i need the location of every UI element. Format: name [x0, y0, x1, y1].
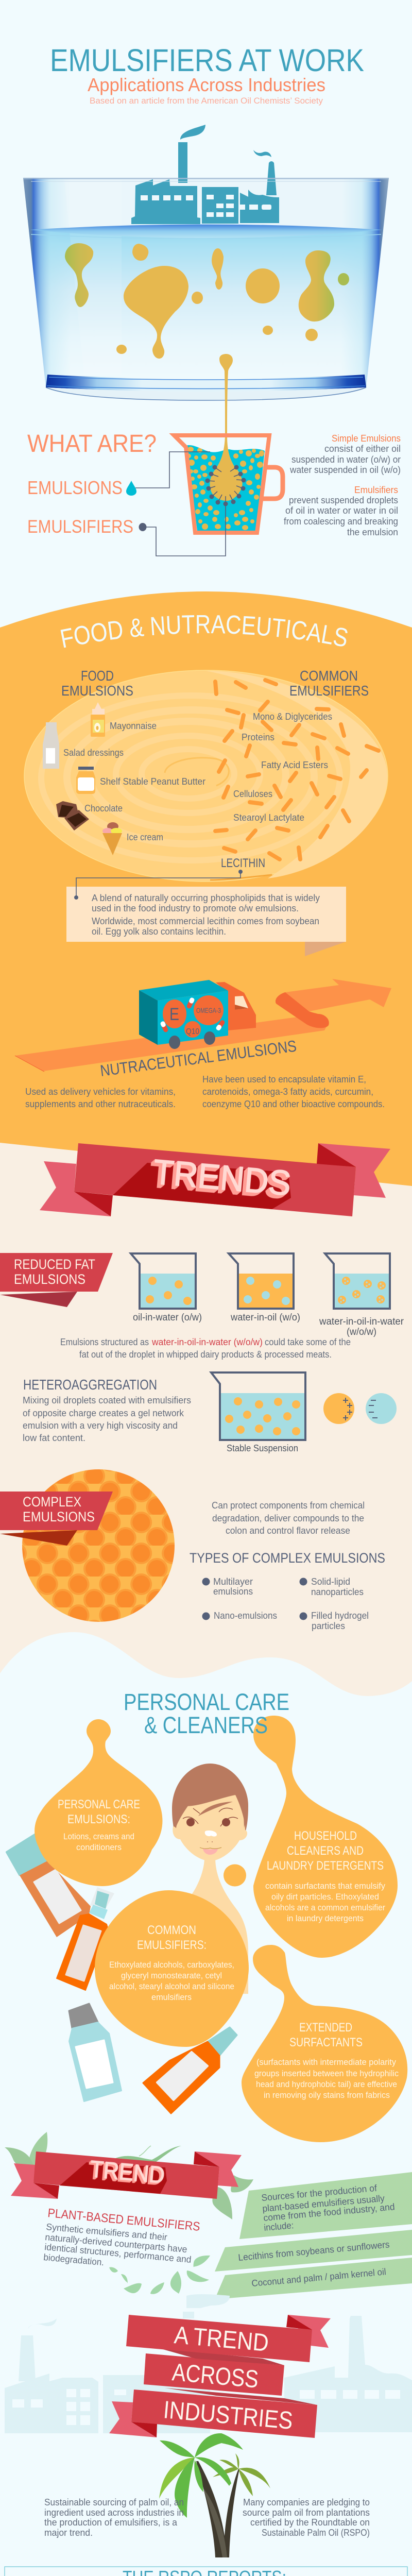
blob: common emulsifiers: COMMON: [147, 1923, 196, 1937]
blob: household cleaners: alcohols are a common emulsifier: [265, 1903, 385, 1912]
icon: factory: [131, 125, 279, 224]
blob: household cleaners: in laundry detergents: [287, 1913, 364, 1923]
blob: common emulsifiers: emulsifiers: [151, 1992, 192, 2002]
label: complex emulsions: EMULSIONS: [23, 1509, 95, 1524]
text block: simple emulsions and emulsifiers: the emulsion: [347, 527, 398, 537]
text block: complex emulsions: degradation, deliver compounds to the: [212, 1513, 364, 1523]
banner: trend: [11, 2151, 242, 2199]
banner: a trend across industries: A TREND: [173, 2321, 270, 2357]
blob: household cleaners: [253, 1716, 398, 1958]
blob: extended surfactants: (surfactants with intermediate polarity: [256, 2057, 396, 2067]
heading: food emulsions: EMULSIONS: [61, 683, 133, 699]
wave divider to personal care section: [0, 1632, 412, 1716]
bottle: light blue: [69, 2004, 122, 2102]
text block: heteroaggregation: [23, 1395, 191, 1443]
blob: extended surfactants: [242, 1945, 407, 2142]
blob: personal care emulsions: Lotions, creams and: [63, 1832, 134, 1841]
connector lines: [135, 452, 226, 556]
beaker: water in oil: [229, 1253, 300, 1323]
icon: chocolate: [56, 801, 89, 831]
label: reduced fat emulsions: EMULSIONS: [14, 1272, 85, 1287]
blob: common emulsifiers: [95, 1890, 249, 2047]
oil drop stream: [210, 354, 243, 501]
blob: personal care emulsions: [35, 1719, 162, 1886]
blob: common emulsifiers: glyceryl monostearate, cetyl: [121, 1971, 222, 1980]
text block: water in oil in water: water-in-oil-in-water (w/o/w): [151, 1337, 263, 1347]
callout: lecithin: [66, 870, 346, 956]
icon: salad dressing bottle: [43, 722, 59, 769]
heading: lecithin: LECITHIN: [221, 856, 265, 870]
bottle: teal and orange: [7, 1834, 91, 1937]
beaker: water in oil: water-in-oil (w/o): [230, 1312, 300, 1323]
text block: heteroaggregation: of opposite charge creates a gel network: [23, 1408, 184, 1418]
text block: companies pledging: Sustainable Palm Oil (RSPO): [262, 2528, 370, 2538]
text block: complex emulsions: Can protect components from chemical: [212, 1500, 365, 1511]
text block: complex emulsions: [212, 1500, 365, 1536]
label: ice cream: Ice cream: [127, 832, 163, 842]
list: types of complex emulsions: Filled hydrogel: [311, 1611, 369, 1621]
illustration: woman: [172, 1764, 248, 1994]
heading: what are emulsions and emulsifiers: EMULSIONS: [27, 477, 123, 498]
icon: nutraceutical truck: [139, 980, 256, 1049]
cream trends background: [0, 1133, 412, 1710]
heading: what are emulsions and emulsifiers: [27, 430, 157, 537]
callout: lecithin: used in the food industry to promote o/w emulsions.: [92, 903, 299, 913]
heading: what are emulsions and emulsifiers: WHAT ARE?: [27, 430, 157, 457]
label: salad dressings: Salad dressings: [63, 748, 124, 758]
text block: simple emulsions and emulsifiers: prevent suspended droplets: [289, 495, 398, 505]
icon: nutraceutical truck: E: [169, 1005, 179, 1024]
icon: charged oil droplet: [323, 1393, 354, 1424]
label: reduced fat emulsions: REDUCED FAT: [14, 1257, 95, 1272]
labels: common emulsifiers list: Stearoyl Lactylate: [233, 812, 304, 823]
text block: companies pledging: [243, 2497, 370, 2538]
text block: nutraceutical left: [25, 1087, 176, 1109]
banner: trends: [40, 1143, 390, 1216]
text block: plant-based emulsifiers: identical structures, performance and: [44, 2242, 192, 2265]
heading: nutraceutical emulsions: NUTRACEUTICAL EMULSIONS: [99, 1037, 298, 1080]
list: types of complex emulsions: emulsions: [213, 1586, 253, 1597]
label: mayonnaise: Mayonnaise: [110, 721, 157, 731]
text block: simple emulsions and emulsifiers: of oil in water or water in oil: [285, 505, 398, 516]
source line: Based on an article from the American Oil Chemists’ Society: [90, 96, 323, 106]
jug handle: [260, 467, 283, 499]
heading: common emulsifiers: [289, 668, 369, 699]
list: types of complex emulsions: Solid-lipid: [311, 1577, 350, 1587]
icon: mayonnaise bottle: [91, 702, 105, 737]
bottle: pump: [57, 1887, 114, 1990]
heading: food emulsions: FOOD: [81, 668, 114, 684]
banner: trends: TRENDS: [152, 1152, 293, 1203]
icon: charged water droplet: [366, 1393, 397, 1424]
panel: lecithins: Lecithins from soybeans or sunflowers: [238, 2239, 390, 2263]
label: complex emulsions: COMPLEX: [23, 1494, 81, 1510]
text block: simple emulsions and emulsifiers: water suspended in oil (w/o): [289, 465, 401, 475]
beaker: stable suspension: Stable Suspension: [227, 1443, 298, 1453]
panel: plant sources: come from the food industry, and: [263, 2201, 395, 2223]
text block: companies pledging: certified by the Roundtable on: [250, 2517, 370, 2528]
leaves behind trend banner: [5, 2132, 253, 2219]
beaker: water in oil in water: [319, 1253, 404, 1337]
text block: nutraceutical right: coenzyme Q10 and other bioactive compounds.: [202, 1099, 385, 1109]
panel: plant sources: Sources for the production of: [261, 2183, 377, 2203]
ribbon road arrow: [15, 979, 391, 1072]
text block: water in oil in water: fat out of the droplet in whipped dairy products & processed meats.: [79, 1349, 332, 1360]
text block: nutraceutical right: carotenoids, omega-3 fatty acids, curcumin,: [202, 1087, 373, 1097]
text block: simple emulsions and emulsifiers: Emulsifiers: [354, 485, 398, 495]
text block: water in oil in water: Emulsions structured as: [60, 1337, 149, 1347]
text block: water in oil in water: could take some of the: [265, 1337, 351, 1347]
glass of water with factory and oil blobs: [23, 125, 389, 400]
heading: what are emulsions and emulsifiers: EMULSIFIERS: [27, 517, 133, 537]
blob: common emulsifiers: Ethoxylated alcohols, carboxylates,: [109, 1960, 234, 1970]
text block: simple emulsions and emulsifiers: from coalescing and breaking: [284, 516, 398, 527]
blob: extended surfactants: groups inserted between the hydrophilic: [254, 2069, 399, 2078]
subtitle: Applications Across Industries: [88, 74, 325, 95]
callout: lecithin: oil. Egg yolk also contains lecithin.: [92, 926, 226, 937]
blob: household cleaners: HOUSEHOLD: [294, 1829, 357, 1843]
text block: complex emulsions: colon and control flavor release: [226, 1526, 350, 1536]
blob: extended surfactants: in removing oily stains from fabrics: [264, 2090, 390, 2100]
heading: food and nutraceuticals: FOOD & NUTRACEUTICALS: [61, 615, 348, 648]
blob: extended surfactants: SURFACTANTS: [289, 2036, 363, 2049]
banner: a trend across industries: [109, 2315, 331, 2438]
heading: common emulsifiers: COMMON: [300, 668, 358, 684]
heading: common emulsifiers: EMULSIFIERS: [289, 683, 369, 699]
list: types of complex emulsions: Nano-emulsions: [214, 1611, 277, 1621]
label: chocolate: Chocolate: [84, 803, 123, 814]
text block: nutraceutical left: Used as delivery vehicles for vitamins,: [25, 1087, 176, 1097]
title: [50, 43, 364, 106]
text block: sustainable sourcing: [44, 2497, 184, 2538]
text block: water in oil in water: [60, 1337, 351, 1360]
blob: household cleaners: oily dirt particles. Ethoxylated: [271, 1892, 379, 1902]
blob: personal care emulsions: EMULSIONS:: [67, 1812, 130, 1826]
heading: heteroaggregation: HETEROAGGREGATION: [23, 1377, 157, 1393]
falling leaves: [109, 2256, 210, 2294]
panel: coconut and palm: Coconut and palm / palm kernel oil: [251, 2266, 386, 2289]
label: peanut butter: Shelf Stable Peanut Butter: [100, 776, 205, 787]
illustration: cosmetic bottles: [7, 1834, 237, 2113]
callout: lecithin: Worldwide, most commercial lecithin comes from soybean: [92, 916, 319, 926]
blob: household cleaners: LAUNDRY DETERGENTS: [267, 1859, 384, 1873]
title: EMULSIFIERS AT WORK: [50, 43, 364, 78]
heading: types of complex emulsions: TYPES OF COMPLEX EMULSIONS: [190, 1550, 385, 1566]
liquid: [186, 445, 265, 531]
banner: a trend across industries: INDUSTRIES: [162, 2396, 294, 2435]
panel: plant sources: include:: [264, 2220, 294, 2233]
panel: lecithins: [215, 2230, 412, 2272]
text block: heteroaggregation: low fat content.: [23, 1433, 85, 1443]
panel: coconut and palm: [215, 2258, 412, 2299]
labels: common emulsifiers list: [233, 711, 332, 823]
label: complex emulsions: [0, 1492, 113, 1546]
callout: lecithin: A blend of naturally occurring phospholipids that is widely: [92, 893, 320, 903]
jug diagram: what are emulsions: [126, 354, 283, 556]
illustration: palm trees: [159, 2433, 270, 2557]
panel: plant sources: [239, 2172, 412, 2239]
text block: heteroaggregation: emulsion with a very high viscosity and: [23, 1420, 178, 1431]
beaker: water in oil in water: (w/o/w): [347, 1327, 376, 1337]
panel: rspo reports: [5, 2567, 407, 2576]
text block: plant-based emulsifiers: naturally-derived counterparts have: [45, 2232, 187, 2255]
beaker: stable suspension: [211, 1372, 305, 1453]
beaker: oil in water: [131, 1253, 202, 1323]
beaker: oil in water: oil-in-water (o/w): [133, 1312, 202, 1323]
icon: water drop: [126, 481, 136, 496]
heading: plant-based emulsifiers: PLANT-BASED EMULSIFIERS: [47, 2206, 201, 2234]
text block: heteroaggregation: Mixing oil droplets coated with emulsifiers: [23, 1395, 191, 1405]
heading: personal care and cleaners: [124, 1689, 289, 1738]
text block: plant-based emulsifiers: biodegradation.: [43, 2252, 105, 2267]
text block: sustainable sourcing: ingredient used across industries in: [44, 2507, 184, 2518]
labels: common emulsifiers list: Fatty Acid Esters: [261, 760, 328, 770]
icon: ice cream: [102, 822, 122, 855]
beaker: water in oil in water: water-in-oil-in-water: [319, 1316, 404, 1327]
label: reduced fat emulsions: [0, 1253, 113, 1307]
labels: common emulsifiers list: Mono & Diglycerides: [253, 711, 332, 722]
icon: peanut butter jar: [76, 767, 95, 794]
list: types of complex emulsions: particles: [312, 1621, 345, 1631]
list: types of complex emulsions: [202, 1577, 369, 1631]
text block: plant-based emulsifiers: [43, 2222, 192, 2267]
heading: personal care and cleaners: PERSONAL CARE: [124, 1689, 289, 1715]
text block: simple emulsions and emulsifiers: suspended in water (o/w) or: [291, 454, 401, 465]
oil blobs: [65, 243, 349, 359]
list: types of complex emulsions: Multilayer: [213, 1577, 253, 1587]
banner: trend: TREND: [89, 2156, 166, 2189]
blob: household cleaners: contain surfactants that emulsify: [265, 1881, 385, 1891]
blob: personal care emulsions: conditioners: [76, 1842, 122, 1852]
icon: complex emulsion globe: [22, 1469, 175, 1622]
text block: sustainable sourcing: Sustainable sourcing of palm oil, an: [44, 2497, 184, 2507]
icon: nutraceutical truck: Q10: [186, 1027, 199, 1036]
text block: nutraceutical right: Have been used to encapsulate vitamin E,: [202, 1074, 366, 1084]
heading: personal care and cleaners: & CLEANERS: [144, 1712, 268, 1738]
blob: personal care emulsions: PERSONAL CARE: [58, 1798, 140, 1811]
text block: companies pledging: Many companies are pledging to: [243, 2497, 370, 2507]
text block: simple emulsions and emulsifiers: [284, 433, 401, 537]
faint factory skyline: [5, 2294, 412, 2433]
blob: common emulsifiers: alcohol, stearyl alcohol and silicone: [109, 1981, 234, 1991]
icon: emulsifier dot: [139, 523, 146, 531]
text block: simple emulsions and emulsifiers: Simple Emulsions: [332, 433, 401, 444]
text block: simple emulsions and emulsifiers: consist of either oil: [324, 444, 401, 454]
emulsifier molecules: [205, 465, 246, 506]
text block: sustainable sourcing: the production of emulsifiers, is a: [44, 2517, 178, 2528]
text block: sustainable sourcing: major trend.: [44, 2528, 93, 2538]
labels: common emulsifiers list: Celluloses: [233, 789, 272, 799]
text block: companies pledging: source palm oil from plantations: [243, 2507, 370, 2518]
panel: plant sources: plant-based emulsifiers usually: [262, 2193, 385, 2214]
text block: nutraceutical left: supplements and other nutraceuticals.: [25, 1099, 176, 1109]
banner: a trend across industries: ACROSS: [171, 2359, 260, 2394]
oil droplets: [187, 447, 264, 530]
jug outline: [174, 435, 269, 533]
text block: plant-based emulsifiers: Synthetic emulsifiers and their: [46, 2222, 168, 2243]
heading: food emulsions: [61, 668, 133, 699]
bottle: orange: [143, 2027, 237, 2113]
plate of emulsion: [24, 670, 388, 882]
blob: household cleaners: CLEANERS AND: [287, 1844, 364, 1858]
blob: extended surfactants: head and hydrophobic tail) are effective: [256, 2079, 397, 2089]
sprinkles: [215, 680, 379, 859]
blob: common emulsifiers: EMULSIFIERS:: [137, 1938, 207, 1952]
list: types of complex emulsions: nanoparticles: [311, 1587, 364, 1597]
text block: nutraceutical right: [202, 1074, 385, 1109]
icon: nutraceutical truck: OMEGA-3: [196, 1006, 221, 1014]
blob: extended surfactants: EXTENDED: [299, 2021, 352, 2035]
small droplet: [224, 1864, 246, 1887]
labels: common emulsifiers list: Proteins: [242, 732, 274, 742]
panel: food and nutraceuticals background: [0, 591, 412, 1186]
